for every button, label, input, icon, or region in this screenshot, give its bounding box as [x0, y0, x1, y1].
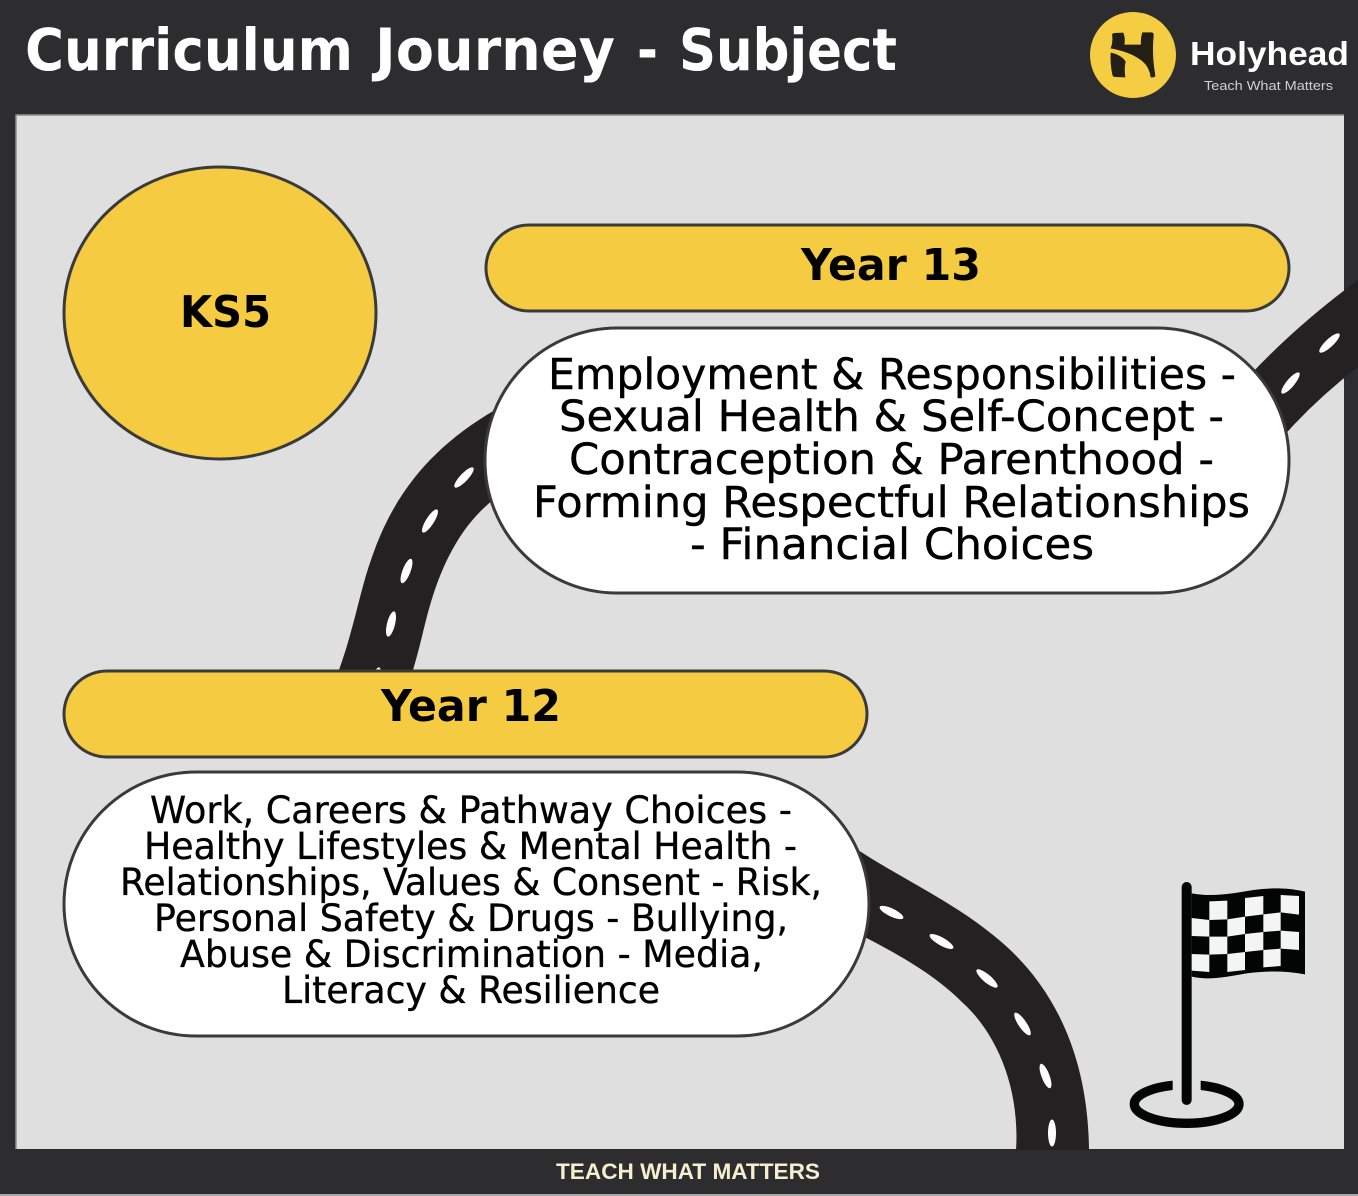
Year 12 topics text — [120, 789, 822, 1012]
footer text: TEACH WHAT MATTERS — [556, 1159, 820, 1184]
Year 13 topics text: Contraception & Parenthood - — [569, 435, 1214, 485]
Year 13 topics text: Forming Respectful Relationships — [533, 478, 1250, 528]
Year 13 topics panel — [485, 328, 1289, 593]
logo tagline: Teach What Matters — [1204, 79, 1333, 93]
road: bottom segment — [855, 848, 1089, 1150]
Year 13 heading bar — [486, 225, 1289, 311]
title — [25, 16, 897, 84]
icon: checkered finish flag — [1134, 882, 1305, 1123]
bottom edge highlight — [0, 1194, 1358, 1196]
Year 12 topics panel — [64, 772, 869, 1036]
Year 12 topics text: Literacy & Resilience — [282, 969, 660, 1012]
KS5 label: KS5 — [180, 287, 271, 338]
title: Subject — [679, 16, 897, 84]
title: - — [637, 16, 658, 84]
Year 13 label: Year 13 — [800, 240, 981, 291]
logo: Holyhead — [1090, 12, 1349, 98]
road: top right segment — [1250, 280, 1358, 440]
Year 12 label: Year 12 — [380, 681, 561, 732]
Year 12 topics text: Personal Safety & Drugs - Bullying, — [154, 897, 788, 940]
logo wordmark: Holyhead — [1190, 35, 1349, 72]
logo badge — [1090, 12, 1176, 98]
road: middle segment — [339, 410, 495, 694]
Year 13 topics text: - Financial Choices — [690, 520, 1094, 570]
Year 12 topics text: Healthy Lifestyles & Mental Health - — [144, 825, 797, 868]
KS5 circle — [64, 167, 376, 459]
Year 12 topics text: Relationships, Values & Consent - Risk, — [120, 861, 822, 904]
Year 12 topics text: Work, Careers & Pathway Choices - — [150, 789, 792, 832]
Year 13 topics text: Sexual Health & Self-Concept - — [559, 392, 1224, 442]
title: Journey — [371, 16, 615, 84]
Year 13 topics text: Employment & Responsibilities - — [548, 350, 1236, 400]
Year 12 topics text: Abuse & Discrimination - Media, — [180, 933, 763, 976]
Year 13 topics text — [533, 350, 1250, 570]
title: Curriculum — [25, 16, 353, 84]
Year 12 heading bar — [64, 671, 867, 757]
